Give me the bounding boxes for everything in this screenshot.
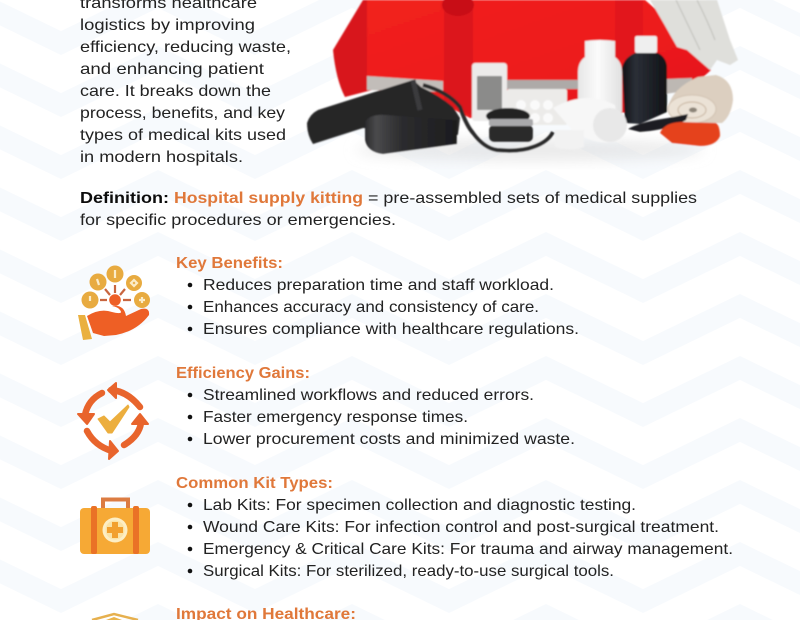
text block: introduction: types of medical kits used (80, 127, 286, 144)
black cuff (307, 80, 460, 144)
section: key benefits: Enhances accuracy and consistency of care. (203, 299, 539, 316)
section: key benefits: Ensures compliance with healthcare regulations. (203, 321, 579, 338)
bag body (367, 0, 711, 118)
text block: introduction: care. It breaks down the (80, 83, 271, 100)
floor shadow (355, 139, 705, 161)
text block: introduction: logistics by improving (80, 17, 255, 34)
text block: introduction: process, benefits, and key (80, 105, 285, 122)
bag pocket (333, 0, 372, 97)
small white cap (555, 130, 584, 150)
illustration: red medical bag with supplies (307, 0, 738, 161)
icon: impact shield (92, 614, 138, 620)
definition: Definition: (80, 190, 169, 207)
icon: hand holding benefits (78, 266, 150, 340)
black pouch (365, 115, 457, 154)
section: common kit types: Wound Care Kits: For infection control and post-surgical treatment. (203, 519, 719, 536)
upright white bottle (578, 40, 622, 112)
text block: introduction (80, 0, 291, 166)
text block: introduction: in modern hospitals. (80, 149, 243, 166)
check mark (98, 405, 129, 433)
section: efficiency gains: Efficiency Gains: (176, 365, 310, 382)
definition: = pre-assembled sets of medical supplies (368, 190, 697, 207)
section: key benefits (176, 255, 579, 338)
icon: medical case (80, 500, 150, 554)
section: efficiency gains (176, 365, 575, 448)
gloves (650, 0, 738, 70)
gauge (486, 108, 530, 124)
section: key benefits: Reduces preparation time and staff workload. (203, 277, 554, 294)
definition: for specific procedures or emergencies. (80, 212, 396, 229)
tube (423, 85, 553, 151)
glucose meter (472, 63, 507, 121)
orange case (660, 122, 720, 146)
section: key benefits: Key Benefits: (176, 255, 283, 272)
text block: introduction: efficiency, reducing waste, (80, 39, 291, 56)
blister pack (507, 89, 567, 125)
dark bottle (622, 53, 667, 124)
text block: introduction: and enhancing patient (80, 61, 265, 78)
section: common kit types: Common Kit Types: (176, 475, 333, 492)
scissors (628, 114, 688, 132)
section: efficiency gains: Streamlined workflows and reduced errors. (203, 387, 534, 404)
bandage roll (668, 75, 733, 123)
section: common kit types: Lab Kits: For specimen collection and diagnostic testing. (203, 497, 636, 514)
section: efficiency gains: Lower procurement costs and minimized waste. (203, 431, 575, 448)
section: common kit types (176, 475, 733, 580)
definition: Hospital supply kitting (174, 190, 363, 207)
section: common kit types: Emergency & Critical Care Kits: For trauma and airway management. (203, 541, 733, 558)
definition (80, 190, 697, 229)
icon: circular arrows with check (78, 383, 148, 459)
lower band (367, 76, 443, 92)
section: efficiency gains: Faster emergency response times. (203, 409, 468, 426)
straps (444, 0, 473, 116)
lying white bottle (553, 98, 620, 143)
section: common kit types: Surgical Kits: For sterilized, ready-to-use surgical tools. (203, 563, 614, 580)
